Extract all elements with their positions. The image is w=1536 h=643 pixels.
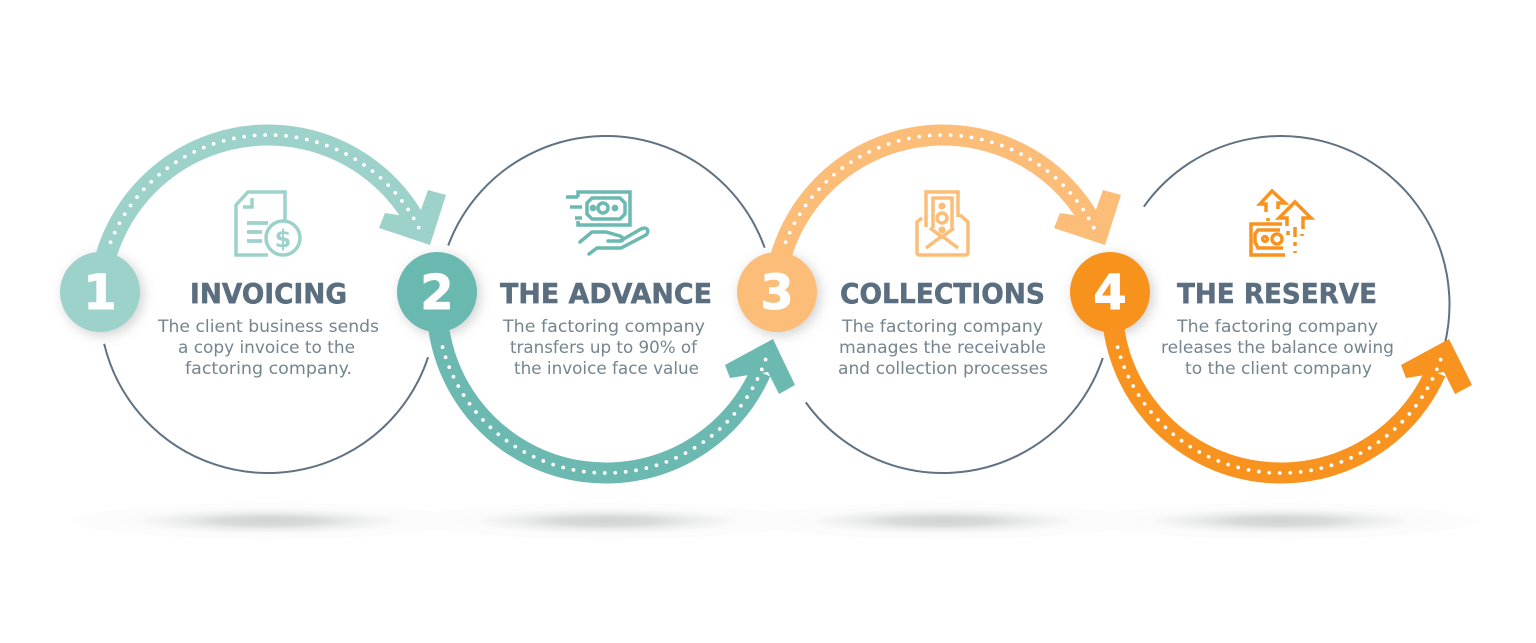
text: invoicing description: a copy invoice to the	[178, 338, 355, 358]
icon: invoice with dollar: $	[275, 225, 291, 253]
text: the advance description	[502, 317, 705, 379]
badge 3: 3	[760, 265, 794, 321]
heading: invoicing: INVOICING	[190, 277, 347, 310]
text: invoicing description: factoring company.	[185, 359, 352, 379]
step 4: the reserve	[1046, 69, 1516, 540]
text: collections description: The factoring company	[841, 317, 1043, 337]
icon: money with up arrows	[1251, 191, 1311, 255]
badge 2: 2	[420, 265, 454, 321]
text: the advance description: The factoring company	[502, 317, 705, 337]
arrow 1	[106, 135, 446, 257]
thin circle outline 3	[730, 91, 1156, 518]
icon: envelope with money	[917, 192, 968, 255]
step 2: the advance	[389, 88, 823, 521]
text: invoicing description: The client business sends	[157, 317, 379, 337]
badge 1: 1	[83, 265, 117, 321]
thin circle outline 2	[389, 88, 823, 521]
thin circle outline 1	[55, 92, 481, 517]
text: the reserve description: The factoring company	[1176, 317, 1378, 337]
text: collections description	[838, 317, 1048, 379]
icon: money over hand	[566, 192, 648, 254]
thin circle outline 4	[1046, 69, 1516, 540]
text: collections description: manages the receivable	[839, 338, 1046, 358]
badge 4: 4	[1093, 265, 1127, 321]
heading: the advance: THE ADVANCE	[500, 277, 712, 310]
step 3: collections	[730, 91, 1156, 518]
icon: invoice with dollar	[236, 192, 300, 255]
text: invoicing description	[157, 317, 379, 379]
arrow 3	[781, 135, 1121, 257]
badge 3	[737, 252, 817, 332]
arrow 4	[1114, 328, 1472, 473]
step 1: invoicing	[55, 92, 481, 517]
heading: collections: COLLECTIONS	[840, 277, 1045, 310]
badge 4	[1070, 252, 1150, 332]
text: the advance description: the invoice face value	[514, 359, 699, 379]
badge 1	[60, 252, 140, 332]
arrow 2	[439, 328, 795, 473]
heading: the reserve: THE RESERVE	[1177, 277, 1377, 310]
text: the reserve description: releases the balance owing	[1161, 338, 1394, 358]
badge 2	[397, 252, 477, 332]
text: the reserve description: to the client company	[1185, 359, 1372, 379]
text: the reserve description	[1161, 317, 1394, 379]
text: collections description: and collection processes	[838, 359, 1048, 379]
text: the advance description: transfers up to 90% of	[510, 338, 698, 358]
ground shadows	[63, 502, 1486, 540]
